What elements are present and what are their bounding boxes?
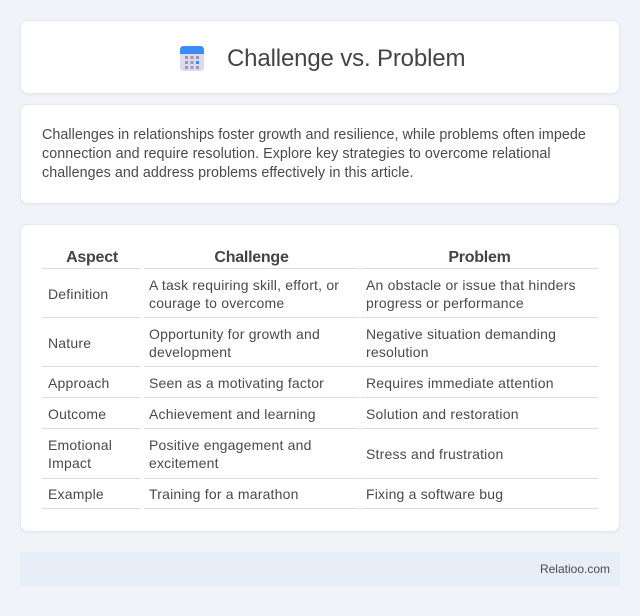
row: Emotional Impact: Impact [48, 455, 91, 471]
column header: Challenge: Challenge [214, 249, 289, 266]
row: Outcome: Outcome [48, 406, 106, 422]
title: Challenge vs. Problem [227, 45, 465, 72]
row: Example [48, 486, 503, 502]
row: Definition [48, 277, 576, 311]
footer text: Relatioo.com [540, 562, 610, 576]
row: Emotional Impact [48, 437, 503, 471]
text block: introduction: Challenges in relationships foster growth and resilience, while problems often impede [42, 127, 586, 143]
row: Definition: A task requiring skill, effort, or [149, 277, 339, 293]
row: Nature [48, 326, 556, 360]
row: Nature: Opportunity for growth and [149, 326, 320, 342]
row: Example: Training for a marathon [149, 486, 299, 502]
text block: introduction: challenges and address problems effectively in this article. [42, 165, 413, 181]
column header: Aspect: Aspect [66, 249, 118, 266]
row: Outcome: Achievement and learning [149, 406, 316, 422]
row: Nature: Nature [48, 335, 91, 351]
row: Emotional Impact: Stress and frustration [366, 446, 503, 462]
footer bar [20, 552, 620, 586]
row: Definition: Definition [48, 286, 108, 302]
row: Approach: Requires immediate attention [366, 375, 554, 391]
row: Approach: Seen as a motivating factor [149, 375, 324, 391]
row: Definition: courage to overcome [149, 295, 284, 311]
column header: Problem: Problem [448, 249, 511, 266]
row: Example: Example [48, 486, 104, 502]
row: Outcome [48, 406, 519, 422]
icon: calendar [180, 46, 204, 71]
panel: introduction [20, 104, 620, 204]
row: Nature: Negative situation demanding [366, 326, 556, 342]
row: Emotional Impact: Emotional [48, 437, 112, 453]
row: Nature: development [149, 344, 231, 360]
text block: introduction: connection and require resolution. Explore key strategies to overcome relational [42, 146, 551, 162]
row: Definition: progress or performance [366, 295, 524, 311]
row: Nature: resolution [366, 344, 429, 360]
row: Emotional Impact: excitement [149, 455, 219, 471]
panel: header [20, 20, 620, 94]
panel: comparison table [20, 224, 620, 532]
row: Approach [48, 375, 554, 391]
row: Definition: An obstacle or issue that hinders [366, 277, 576, 293]
row: Outcome: Solution and restoration [366, 406, 519, 422]
text block: introduction [42, 127, 586, 181]
row: Approach: Approach [48, 375, 110, 391]
row: Example: Fixing a software bug [366, 486, 503, 502]
row: Emotional Impact: Positive engagement and [149, 437, 312, 453]
